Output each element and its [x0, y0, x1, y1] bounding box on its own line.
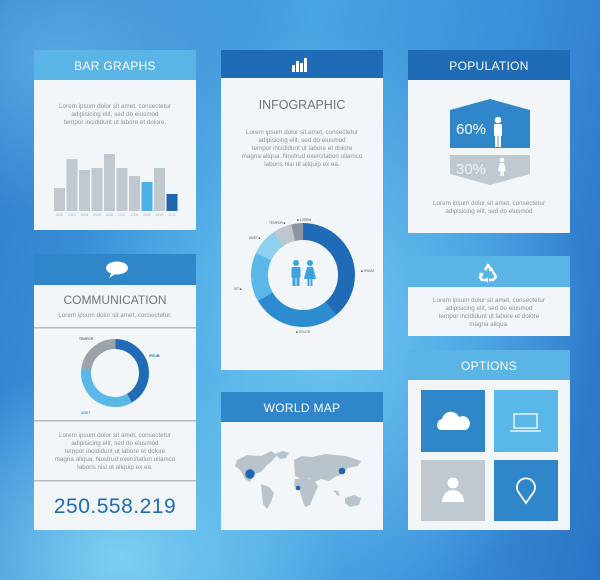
text block: infographic: magna aliqua. Nostrud exercitation ullamco — [242, 153, 362, 160]
text block: infographic: laboris nisi ut aliquip ex ea. — [264, 161, 340, 168]
text block: recycle: tempor incididunt ut labore et dolore — [439, 313, 539, 320]
text block: communication: Lorem ipsum dolor sit amet, consectetur — [59, 432, 171, 439]
bar chart: 2010 — [156, 213, 163, 217]
number: 250.558.219 — [54, 495, 176, 518]
panel: recycle — [408, 256, 570, 336]
bar chart: 2003 — [68, 213, 76, 217]
text block: communication: tempor incididunt ut labore et dolore — [65, 448, 165, 455]
panel: options — [408, 350, 570, 530]
bar chart: 2008 — [131, 213, 138, 217]
text block: infographic: tempor incididunt ut labore et dolore — [252, 145, 352, 152]
title: communication: COMMUNICATION — [63, 293, 167, 307]
donut chart: infographic: TEMPOR ■ — [269, 221, 286, 225]
bar chart: 2009 — [143, 213, 151, 217]
text block: population: adipisicing elit, sed do eiusmod — [445, 208, 533, 215]
bar chart: 2004 — [81, 213, 88, 217]
text block: recycle: magna aliqua. — [469, 321, 509, 328]
chart: population shapes: 60% — [456, 121, 486, 138]
text block: communication: laboris nisi ut aliquip ex ea. — [77, 464, 153, 471]
text block: recycle: Lorem ipsum dolor sit amet, consectetur — [433, 297, 545, 304]
panel: communication: TEMPOR — [79, 337, 94, 341]
panel: population — [408, 50, 570, 233]
panel: communication: AMET — [81, 411, 90, 415]
text block: bar graphs — [59, 103, 171, 126]
heading: options: OPTIONS — [461, 359, 517, 373]
icon: cloud tile — [421, 390, 485, 452]
heading: infographic icon bar — [221, 50, 383, 78]
donut chart: infographic: ■ LOREM — [297, 218, 311, 222]
panel: communication — [34, 254, 196, 530]
heading: bar graphs — [34, 50, 196, 80]
bar chart: 2002 — [56, 213, 63, 217]
donut chart: infographic: ■ IPSUM — [361, 269, 374, 273]
panel: communication: IPSUM — [149, 354, 160, 358]
text block: communication: adipisicing elit, sed do eiusmod — [71, 440, 159, 447]
text block: infographic: adipisicing elit, sed do eiusmod — [258, 137, 346, 144]
donut chart: infographic: SIT ■ — [234, 287, 242, 291]
heading: options — [408, 350, 570, 380]
donut chart: infographic — [234, 218, 374, 334]
bar chart — [54, 154, 178, 217]
text block: infographic: Lorem ipsum dolor sit amet, consectetur — [246, 129, 358, 136]
heading: recycle icon — [408, 256, 570, 287]
icon: man and woman — [292, 260, 316, 286]
panel: infographic — [221, 50, 383, 370]
bar chart: 2007 — [118, 213, 126, 217]
text block: bar graphs: tempor incididunt ut labore et dolore. — [64, 119, 166, 126]
bar chart: 2006 — [106, 213, 113, 217]
text: communication: Lorem ipsum dolor sit amet, consectetur. — [58, 312, 172, 319]
text block: bar graphs: adipisicing elit, sed do eiusmod — [71, 111, 159, 118]
donut chart: communication — [75, 333, 155, 413]
chart: population shapes: 30% — [456, 161, 486, 178]
text block: recycle — [433, 297, 545, 328]
heading: world map — [221, 392, 383, 422]
heading: world map: WORLD MAP — [264, 401, 340, 415]
title: infographic: INFOGRAPHIC — [259, 98, 345, 112]
tiles — [421, 390, 558, 521]
bar chart: 2011 — [168, 213, 176, 217]
bar chart: 2005 — [93, 213, 101, 217]
donut chart: infographic: AMET ■ — [249, 236, 261, 240]
text block: population — [433, 200, 545, 215]
panel: bar graphs — [34, 50, 196, 230]
world map — [235, 451, 361, 509]
heading: bar graphs: BAR GRAPHS — [74, 59, 156, 73]
text block: population: Lorem ipsum dolor sit amet, consectetur — [433, 200, 545, 207]
panel: world map — [221, 392, 383, 530]
heading: population: POPULATION — [449, 59, 529, 73]
text block: communication — [55, 432, 176, 471]
heading: population — [408, 50, 570, 80]
text block: infographic — [242, 129, 362, 168]
heading: speech bubble icon — [34, 254, 196, 285]
text block: communication: magna aliqua. Nostrud exercitation ullamco — [55, 456, 175, 463]
chart: population shapes — [450, 99, 530, 185]
text block: recycle: adipisicing elit, sed do eiusmod — [445, 305, 533, 312]
text block: bar graphs: Lorem ipsum dolor sit amet, consectetur — [59, 103, 171, 110]
donut chart: infographic: ■ DOLOR — [296, 330, 311, 334]
